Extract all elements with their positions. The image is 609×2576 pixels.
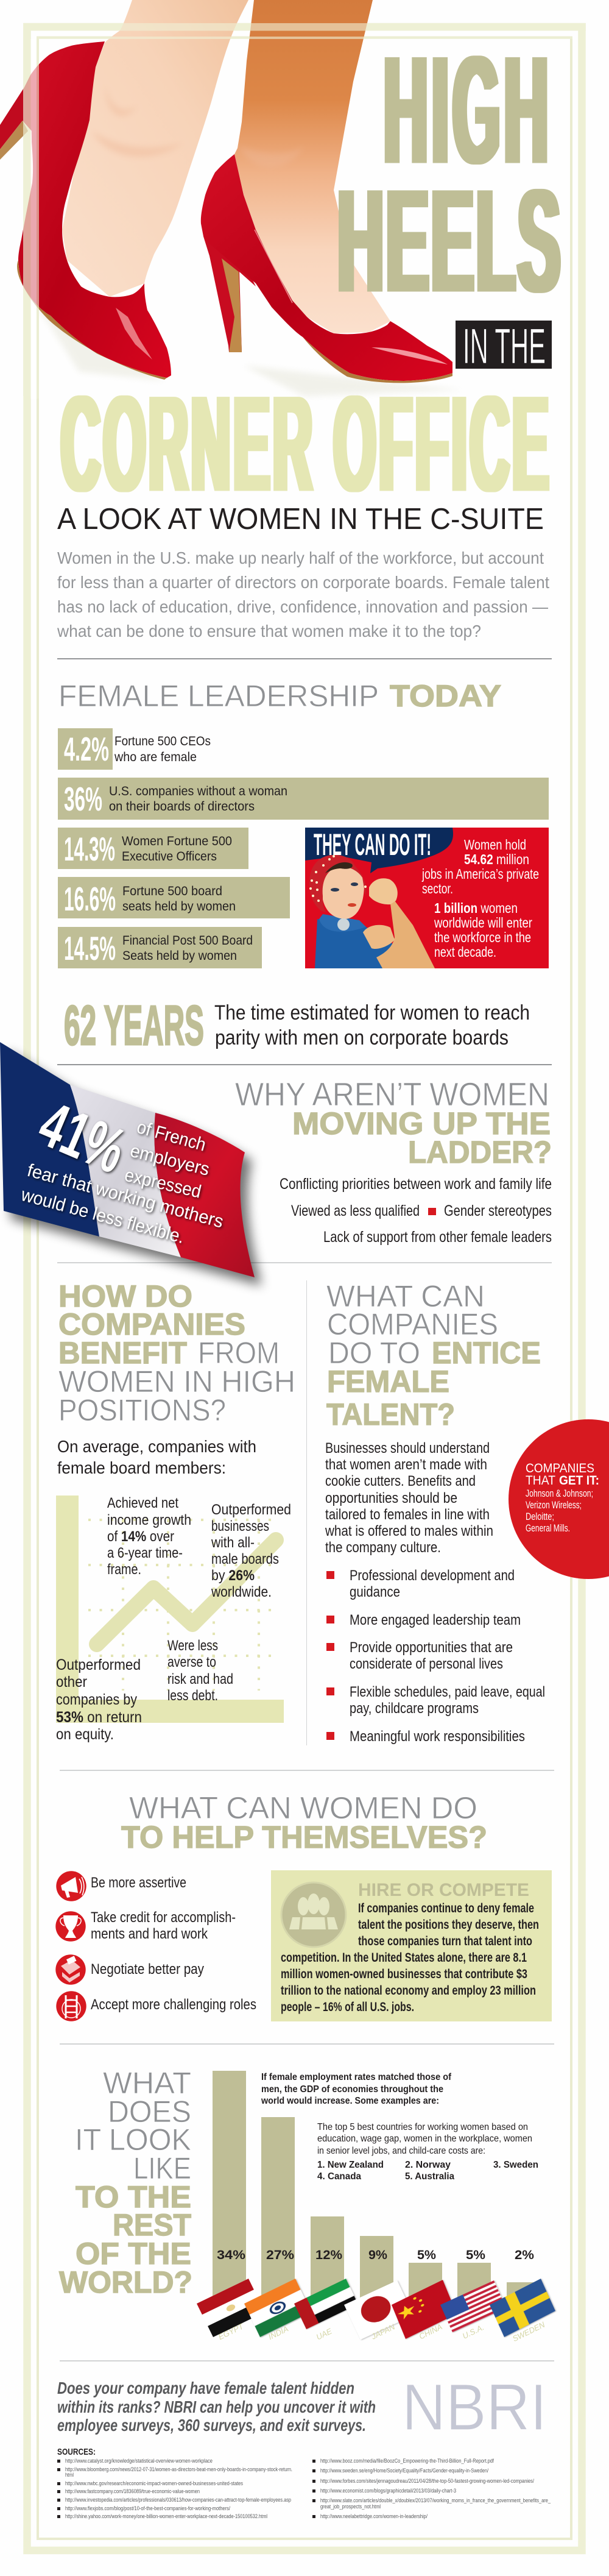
stat: 14.3% officers bbox=[58, 828, 248, 869]
chart note: all-male boards: by 26% bbox=[211, 1567, 255, 1584]
heading: female leadership today: TODAY bbox=[390, 679, 501, 713]
heading: why aren't women moving up the ladder: MOVING UP THE bbox=[292, 1106, 551, 1141]
text: take credit: Take credit for accomplish- bbox=[91, 1909, 236, 1926]
icon: Rosie the Riveter bbox=[309, 855, 435, 968]
heading: what does it look like bbox=[59, 2066, 192, 2299]
callout text bbox=[421, 837, 539, 960]
stat: 4.2% CEOs: 4.2% bbox=[64, 730, 109, 768]
bullet list: what companies can offer bbox=[326, 1567, 545, 1745]
right leg bbox=[234, 0, 390, 333]
heading: what can companies do: WHAT CAN bbox=[326, 1279, 485, 1313]
text: accept challenging roles: Accept more challenging roles bbox=[91, 1996, 256, 2013]
text: take credit bbox=[91, 1909, 236, 1942]
bar values: 5% bbox=[466, 2248, 485, 2262]
title word HEELS: HEELS bbox=[337, 160, 563, 323]
speech bubble bbox=[305, 828, 453, 873]
text: GDP note: men, the GDP of economies throughout the bbox=[261, 2084, 443, 2095]
text: top 5 countries: 5. Australia bbox=[405, 2171, 454, 2182]
bar values: 5% bbox=[417, 2248, 436, 2262]
callout text: worldwide will enter bbox=[434, 915, 532, 931]
flag: Japan bbox=[344, 2280, 414, 2340]
text: take credit: ments and hard work bbox=[91, 1926, 208, 1942]
text: GDP note bbox=[261, 2072, 452, 2106]
callout text: the workforce in the bbox=[434, 929, 531, 945]
frame overlay across photo bbox=[23, 23, 586, 399]
flag: Egypt bbox=[197, 2279, 265, 2337]
panel: they can do it bbox=[305, 828, 549, 968]
right shoe bbox=[201, 154, 452, 381]
text: businesses should understand: cookie cutters. Benefits and bbox=[325, 1473, 476, 1489]
flag: China bbox=[392, 2280, 457, 2339]
panel text: trillion to the national economy and employ 23 million bbox=[281, 1984, 536, 1998]
country labels: EGYPT bbox=[217, 2321, 245, 2341]
heading: what does it look like: LIKE bbox=[133, 2151, 191, 2185]
stat: 16.6% board seats: Fortune 500 board bbox=[122, 884, 222, 898]
country labels: SWEDEN bbox=[511, 2319, 547, 2343]
text: top 5 countries: 1. New Zealand bbox=[317, 2160, 384, 2170]
heading: how do companies benefit bbox=[58, 1279, 295, 1427]
chart note: income growth bbox=[107, 1495, 191, 1578]
flag text: of French bbox=[135, 1117, 208, 1155]
chart note: all-male boards: worldwide. bbox=[211, 1584, 272, 1600]
bullet list: what companies can offer: Flexible schedules, paid leave, equal bbox=[350, 1684, 545, 1700]
sources column 2: http://www.economist.com/blogs/graphicdetail/2013/03/daily-chart-3 bbox=[320, 2488, 456, 2494]
intro paragraph bbox=[57, 548, 549, 640]
icon: trophy bbox=[55, 1911, 86, 1942]
callout: companies that get it bbox=[509, 1419, 609, 1579]
heading: how do companies benefit: FROM bbox=[198, 1336, 280, 1370]
bar values: 27% bbox=[266, 2248, 294, 2262]
country labels: UAE bbox=[315, 2326, 334, 2342]
heading: what can women do: WHAT CAN WOMEN DO bbox=[129, 1790, 477, 1825]
skin shading bbox=[91, 85, 304, 168]
country labels: JAPAN bbox=[369, 2322, 396, 2341]
stat: 62 years: parity with men on corporate boards bbox=[215, 1026, 509, 1049]
bar values bbox=[217, 2248, 534, 2262]
left shoe stiletto bbox=[0, 75, 32, 149]
chart note: less debt: risk and had bbox=[167, 1671, 233, 1687]
chart note: less debt: less debt. bbox=[167, 1687, 218, 1704]
callout text: jobs in America’s private bbox=[421, 866, 539, 882]
panel text: If companies continue to deny female bbox=[358, 1901, 534, 1915]
bar chart: GDP increase by country bbox=[197, 2071, 555, 2343]
list: reasons: Viewed as less qualified bbox=[291, 1202, 420, 1219]
chart note: income growth: income growth bbox=[107, 1512, 191, 1528]
heading: what does it look like: OF THE bbox=[76, 2237, 191, 2271]
list: reasons: Lack of support from other female leaders bbox=[323, 1229, 552, 1246]
text: top 5 countries bbox=[317, 2122, 538, 2182]
icon: group of people bbox=[281, 1882, 346, 1947]
closing question: employee surveys, 360 surveys, and exit surveys. bbox=[57, 2416, 366, 2435]
panel: they can do it: THEY CAN DO IT! bbox=[314, 828, 431, 862]
text: businesses should understand bbox=[325, 1440, 493, 1556]
stat: 16.6% board seats: 16.6% bbox=[64, 880, 116, 918]
country labels: CHINA bbox=[418, 2322, 443, 2341]
heading: what can women do: TO HELP THEMSELVES? bbox=[121, 1820, 487, 1854]
heading: why aren't women moving up the ladder: WHY AREN’T WOMEN bbox=[235, 1076, 549, 1113]
heading: what can companies do: FEMALE bbox=[327, 1364, 449, 1399]
chart note: income growth: Achieved net bbox=[107, 1495, 178, 1511]
sources column 1: http://www.fastcompany.com/1836089/true-economic-value-women bbox=[65, 2488, 200, 2495]
sources column 1 bbox=[65, 2458, 292, 2520]
heading: what does it look like: REST bbox=[113, 2208, 191, 2242]
closing question: Does your company have female talent hidden bbox=[57, 2379, 354, 2397]
panel text: talent the positions they deserve, then bbox=[358, 1918, 539, 1932]
heading: how do companies benefit: BENEFIT bbox=[58, 1336, 187, 1370]
text: businesses should understand: opportunities should be bbox=[325, 1490, 457, 1506]
sources column 2: http://www.forbes.com/sites/jennagoudreau/2011/04/28/the-top-50-fastest-growing-women-led-companies/ bbox=[320, 2478, 534, 2485]
sources column 1: http://www.bloomberg.com/news/2012-07-31/women-as-directors-beat-men-only-boards-in-company-stock-return. bbox=[65, 2466, 292, 2473]
chart note: less debt bbox=[167, 1637, 233, 1704]
heading: how do companies benefit: WOMEN IN HIGH bbox=[58, 1364, 295, 1399]
sources bbox=[57, 2447, 551, 2520]
heading: what does it look like: WHAT bbox=[103, 2066, 191, 2100]
text: on average bbox=[57, 1437, 256, 1477]
chart note: return on equity: companies by bbox=[56, 1691, 137, 1708]
chart note: return on equity: other bbox=[56, 1673, 87, 1691]
callout text: 1 billion women bbox=[434, 900, 518, 916]
text: negotiate: Negotiate better pay bbox=[91, 1961, 204, 1978]
chart note: return on equity: on equity. bbox=[56, 1726, 114, 1743]
list: reasons: Gender stereotypes bbox=[444, 1202, 552, 1219]
panel: hire or compete bbox=[271, 1870, 552, 2021]
heading: how do companies benefit: POSITIONS? bbox=[58, 1393, 226, 1427]
flag text bbox=[18, 1088, 225, 1247]
French flag callout bbox=[0, 1042, 262, 1286]
panel text: people – 16% of all U.S. jobs. bbox=[281, 2000, 414, 2014]
stat: 14.3% officers: Executive Officers bbox=[122, 850, 217, 864]
country labels bbox=[217, 2319, 547, 2343]
stat: 14.3% officers: 14.3% bbox=[64, 830, 115, 868]
heading: how do companies benefit: COMPANIES bbox=[58, 1307, 245, 1341]
title words CORNER OFFICE: CORNER OFFICE bbox=[61, 367, 552, 519]
stat: 14.5% financial post: Seats held by women bbox=[122, 949, 237, 963]
callout text: Women hold bbox=[464, 837, 526, 853]
callout text: next decade. bbox=[434, 944, 496, 960]
bar values: 12% bbox=[315, 2248, 342, 2262]
subtitle: A LOOK AT WOMEN IN THE C-SUITE bbox=[57, 503, 544, 536]
chart note: income growth: of 14% over bbox=[107, 1528, 174, 1545]
icon: megaphone bbox=[56, 1871, 86, 1901]
bullet list: what companies can offer: More engaged leadership team bbox=[350, 1612, 521, 1628]
text: GDP note: If female employment rates matched those of bbox=[261, 2072, 452, 2082]
flag text: fear that working mothers bbox=[25, 1160, 225, 1232]
callout text: sector. bbox=[422, 881, 453, 896]
sources column 1: http://shine.yahoo.com/work-money/one-billion-women-enter-workplace-next-decade-150100532.html bbox=[65, 2513, 267, 2520]
logo: NBRI: NBRI bbox=[402, 2370, 547, 2444]
left shoe bbox=[18, 41, 171, 378]
heading: what can companies do: COMPANIES bbox=[327, 1307, 498, 1341]
panel: hire or compete: HIRE OR COMPETE bbox=[358, 1880, 529, 1900]
sources column 2: great_job_prospects_not.html bbox=[320, 2503, 381, 2510]
panel text: competition. In the United States alone, there are 8.1 bbox=[281, 1951, 527, 1965]
stat: 36% companies: U.S. companies without a woman bbox=[109, 784, 287, 798]
heading: how do companies benefit: HOW DO bbox=[58, 1279, 192, 1313]
bar values: 34% bbox=[217, 2248, 245, 2262]
title: HIGH HEELS IN THE CORNER OFFICE bbox=[61, 24, 563, 519]
floor shadows bbox=[37, 305, 463, 396]
icon: cash stack bbox=[55, 1954, 86, 1985]
stat: 14.3% officers: Women Fortune 500 bbox=[122, 834, 232, 848]
stat: 4.2% CEOs: who are female bbox=[114, 750, 197, 764]
title word HIGH: HIGH bbox=[384, 24, 552, 196]
text: GDP note: world would increase. Some examples are: bbox=[261, 2096, 439, 2106]
text: on average: On average, companies with bbox=[57, 1437, 256, 1456]
stat: 14.5% financial post: 14.5% bbox=[64, 929, 116, 967]
callout: companies that get it: GET IT: bbox=[559, 1474, 599, 1488]
text: businesses should understand: that women aren’t made with bbox=[325, 1457, 487, 1473]
callout: companies that get it: Verizon Wireless; bbox=[526, 1499, 582, 1511]
country labels: U.S.A. bbox=[461, 2322, 485, 2341]
stat: 14.5% financial post bbox=[58, 927, 262, 968]
bullet list: what companies can offer: guidance bbox=[350, 1584, 400, 1600]
stat: 16.6% board seats: seats held by women bbox=[122, 899, 236, 914]
flag text: 41% bbox=[29, 1088, 136, 1187]
sources column 1: http://www.nwbc.gov/research/economic-impact-women-owned-businesses-united-states bbox=[65, 2480, 243, 2487]
callout: companies that get it: General Mills. bbox=[526, 1522, 570, 1534]
chart note: all-male boards bbox=[211, 1502, 291, 1600]
text: businesses should understand: tailored to females in line with bbox=[325, 1506, 490, 1523]
panel text: million women-owned businesses that contribute $3 bbox=[281, 1967, 527, 1981]
intro paragraph: has no lack of education, drive, confidence, innovation and passion — bbox=[57, 597, 548, 616]
chart note: less debt: Were less bbox=[167, 1637, 218, 1654]
bullet list: what companies can offer: considerate of personal lives bbox=[350, 1656, 503, 1672]
chart note: income growth: a 6-year time- bbox=[107, 1545, 183, 1561]
IN THE black tag bbox=[456, 319, 552, 374]
text: top 5 countries: 4. Canada bbox=[317, 2171, 361, 2182]
heading: what can companies do: TALENT? bbox=[326, 1397, 455, 1432]
list: reasons bbox=[280, 1176, 552, 1246]
chart note: return on equity: Outperformed bbox=[56, 1656, 141, 1673]
sources column 2: http://www.neelabettridge.com/women-in-leadership/ bbox=[320, 2513, 428, 2520]
closing question: within its ranks? NBRI can help you uncover it with bbox=[57, 2397, 376, 2416]
heading: what can companies do: ENTICE bbox=[432, 1336, 541, 1370]
heading: what can companies do: DO TO bbox=[328, 1336, 420, 1370]
bullet list: what companies can offer: Professional development and bbox=[350, 1567, 515, 1584]
stat: 62 years bbox=[64, 995, 530, 1057]
flag: India bbox=[244, 2279, 311, 2337]
heading: what does it look like: IT LOOK bbox=[75, 2123, 191, 2157]
stat: 36% companies: 36% bbox=[64, 780, 102, 818]
callout: companies that get it: THAT bbox=[526, 1474, 555, 1488]
sources column 1: http://www.flexjobs.com/blog/post/10-of-the-best-companies-for-working-mothers/ bbox=[65, 2505, 230, 2512]
flag text: employers bbox=[128, 1141, 211, 1180]
callout: companies that get it: Deloitte; bbox=[526, 1511, 554, 1522]
bullet list: what companies can offer: Provide opportunities that are bbox=[350, 1639, 513, 1656]
bullet list: what companies can offer: pay, childcare programs bbox=[350, 1700, 479, 1717]
flag: Sweden bbox=[490, 2279, 555, 2337]
sources column 2: http://www.booz.com/media/file/BoozCo_Empowering-the-Third-Billion_Full-Report.pdf bbox=[320, 2458, 494, 2464]
stat: 4.2% CEOs: Fortune 500 CEOs bbox=[114, 734, 211, 748]
chart note: income growth: frame. bbox=[107, 1561, 141, 1578]
bar values: 9% bbox=[368, 2248, 387, 2262]
stat: 14.5% financial post: Financial Post 500 Board bbox=[122, 934, 253, 948]
stat: 36% companies: on their boards of directors bbox=[109, 800, 255, 814]
chart note: return on equity bbox=[56, 1656, 142, 1743]
sources column 2: http://www.sweden.se/eng/Home/Society/Equality/Facts/Gender-equality-in-Sweden/ bbox=[320, 2468, 488, 2474]
flag: UAE bbox=[294, 2279, 358, 2329]
chart note: return on equity: 53% on return bbox=[56, 1709, 142, 1726]
line chart: benefits bbox=[56, 1495, 291, 1743]
heading: female leadership today: FEMALE LEADERSHIP bbox=[58, 679, 379, 713]
text: businesses should understand: Businesses should understand bbox=[325, 1440, 490, 1457]
text: businesses should understand: what is offered to males within bbox=[325, 1523, 493, 1539]
hero photo: legs in red stiletto heels bbox=[0, 0, 463, 396]
callout text: 54.62 million bbox=[464, 851, 529, 867]
callout: companies that get it: COMPANIES bbox=[526, 1461, 594, 1475]
heading: what can companies do bbox=[326, 1279, 541, 1432]
bullet list: what companies can offer: Meaningful work responsibilities bbox=[350, 1728, 525, 1745]
sources: SOURCES: bbox=[57, 2447, 96, 2457]
bar values: 2% bbox=[515, 2248, 534, 2262]
right shoe stiletto bbox=[203, 236, 256, 352]
sources column 2 bbox=[320, 2458, 551, 2520]
heading: what does it look like: DOES bbox=[108, 2095, 191, 2129]
chart note: all-male boards: businesses bbox=[211, 1518, 269, 1535]
chart note: all-male boards: male boards bbox=[211, 1551, 279, 1567]
sources column 1: http://www.investopedia.com/articles/professionals/030613/how-companies-can-attract-top-female-employees.asp bbox=[65, 2497, 291, 2503]
left leg bbox=[62, 0, 248, 297]
text: top 5 countries: 2. Norway bbox=[405, 2160, 451, 2170]
chart note: all-male boards: with all- bbox=[211, 1535, 255, 1551]
text: top 5 countries: 3. Sweden bbox=[493, 2160, 538, 2170]
heading: why aren't women moving up the ladder bbox=[235, 1076, 552, 1169]
intro paragraph: what can be done to ensure that women make it to the top? bbox=[57, 622, 481, 640]
icon: ladder bbox=[56, 1991, 86, 2021]
heading: what does it look like: WORLD? bbox=[59, 2265, 192, 2299]
chart note: less debt: averse to bbox=[167, 1654, 216, 1670]
closing question bbox=[57, 2379, 376, 2435]
heading: what can women do bbox=[121, 1790, 487, 1854]
heading: why aren't women moving up the ladder: LADDER? bbox=[408, 1135, 552, 1169]
sources column 2: http://www.slate.com/articles/double_x/doublex/2013/07/working_moms_in_france_the_government_benefits_are_ bbox=[320, 2497, 551, 2504]
text: on average: female board members: bbox=[57, 1458, 226, 1477]
heading: what does it look like: TO THE bbox=[76, 2180, 191, 2214]
intro paragraph: for less than a quarter of directors on corporate boards. Female talent bbox=[57, 573, 549, 592]
flag text: expressed bbox=[122, 1165, 203, 1202]
sources column 1: http://www.catalyst.org/knowledge/statistical-overview-women-workplace bbox=[65, 2458, 213, 2464]
intro paragraph: Women in the U.S. make up nearly half of the workforce, but account bbox=[57, 548, 544, 567]
sources column 1: html bbox=[65, 2472, 74, 2478]
text: top 5 countries: in senior level jobs, and child-care costs are: bbox=[317, 2146, 485, 2156]
panel text bbox=[281, 1901, 539, 2014]
country labels: INDIA bbox=[267, 2324, 290, 2341]
flag text: would be less flexible. bbox=[18, 1185, 186, 1247]
stat: 36% companies bbox=[58, 778, 549, 820]
text: be more assertive: Be more assertive bbox=[91, 1875, 186, 1891]
chart note: all-male boards: Outperformed bbox=[211, 1502, 291, 1518]
text: top 5 countries: education, wage gap, women in the workplace, women bbox=[317, 2134, 532, 2144]
stat: 4.2% CEOs bbox=[58, 728, 211, 770]
stat: 62 years: 62 YEARS bbox=[64, 995, 204, 1057]
panel text: those companies turn that talent into bbox=[358, 1934, 532, 1948]
list: reasons: Conflicting priorities between work and family life bbox=[280, 1176, 552, 1193]
stat: 62 years: The time estimated for women to reach bbox=[214, 1001, 530, 1024]
text: top 5 countries: The top 5 best countries for working women based on bbox=[317, 2122, 528, 2132]
text: businesses should understand: the company culture. bbox=[325, 1539, 441, 1556]
flag: USA bbox=[440, 2280, 506, 2332]
stat: 16.6% board seats bbox=[58, 877, 290, 918]
